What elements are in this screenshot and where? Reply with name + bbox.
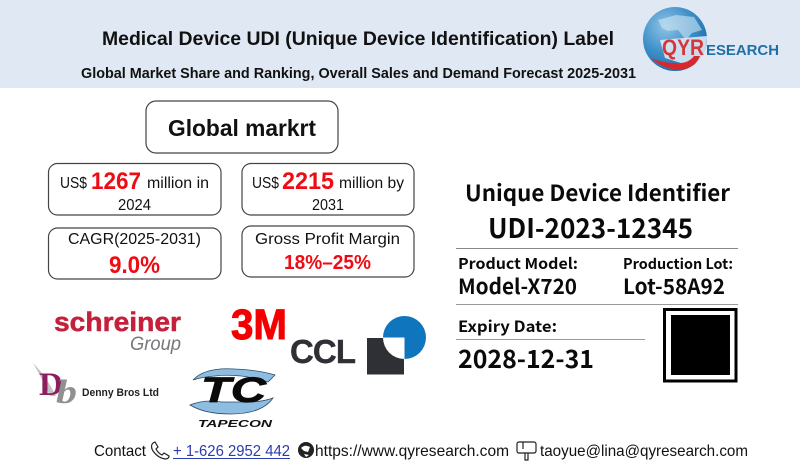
logo: CCL [290,316,426,374]
panel: CAGR: CAGR(2025-2031) [68,231,201,248]
panel: 2031 market value [242,164,414,215]
footer contact line: Contact [94,443,147,460]
panel: 2031 market value: 2215 [282,168,334,195]
icon: globe [298,442,314,458]
panel: global market heading: Global markrt [168,115,316,141]
footer contact line: taoyue@lina@qyresearch.com [540,443,748,460]
logo: Tapecon: TAPECON [198,418,273,430]
logo: Schreiner Group [54,307,182,355]
panel: 2031 market value: US$ [252,175,279,192]
product model: Model-X720 [458,271,577,301]
panel: 2024 market value: 1267 [91,168,141,195]
production lot: Production Lot: [623,253,733,274]
production lot [623,253,733,301]
expiry date: Expiry Date: [458,315,557,337]
footer contact line: https://www.qyresearch.com [315,443,509,460]
logo: QYResearch [643,7,779,71]
subtitle: Global Market Share and Ranking, Overall Sales and Demand Forecast 2025-2031 [81,65,636,82]
logo: QYResearch: ESEARCH [706,42,779,59]
panel: 2031 market value: million by [339,175,404,192]
panel: 2031 market value: 2031 [312,197,344,214]
icon: mailbox [517,442,536,460]
logo: Denny Bros [33,363,159,411]
label heading: Unique Device Identifier [465,176,730,208]
logo: CCL: CCL [290,333,356,370]
footer contact line: + 1-626 2952 442 [173,443,290,460]
logo: Denny Bros: b [56,374,77,411]
production lot: Lot-58A92 [623,271,725,301]
logo: Denny Bros: Denny Bros Ltd [82,387,159,399]
icon: 2D barcode square [664,310,736,381]
panel: gross profit margin [242,226,414,277]
logo: Denny Bros: D [39,367,63,403]
logo: QYResearch: QYR [662,35,704,60]
footer contact line [94,442,748,460]
panel: global market heading [146,101,338,153]
header band [0,0,800,88]
expiry date: 2028-12-31 [458,340,594,376]
logo: Schreiner Group: schreiner [54,307,182,337]
logo: Tapecon [190,369,275,430]
product model: Product Model: [458,253,578,274]
panel: 2024 market value: million in [147,175,209,192]
panel: 2024 market value: US$ [60,175,87,192]
logo: 3M: 3M [231,301,287,349]
panel: 2024 market value [48,164,221,215]
title: Medical Device UDI (Unique Device Identification) Label [102,29,614,50]
icon: phone [152,442,169,459]
panel: CAGR: 9.0% [109,252,160,279]
expiry date [458,315,594,376]
product model [458,253,578,301]
panel: UDI label [456,176,738,381]
panel: gross profit margin: 18%–25% [284,252,371,274]
UDI number: UDI-2023-12345 [488,207,693,246]
panel: gross profit margin: Gross Profit Margin [255,231,400,248]
logo: Tapecon: TC [201,371,267,410]
logo: Schreiner Group: Group [130,334,181,355]
panel: CAGR [48,228,221,279]
panel: 2024 market value: 2024 [118,197,151,214]
